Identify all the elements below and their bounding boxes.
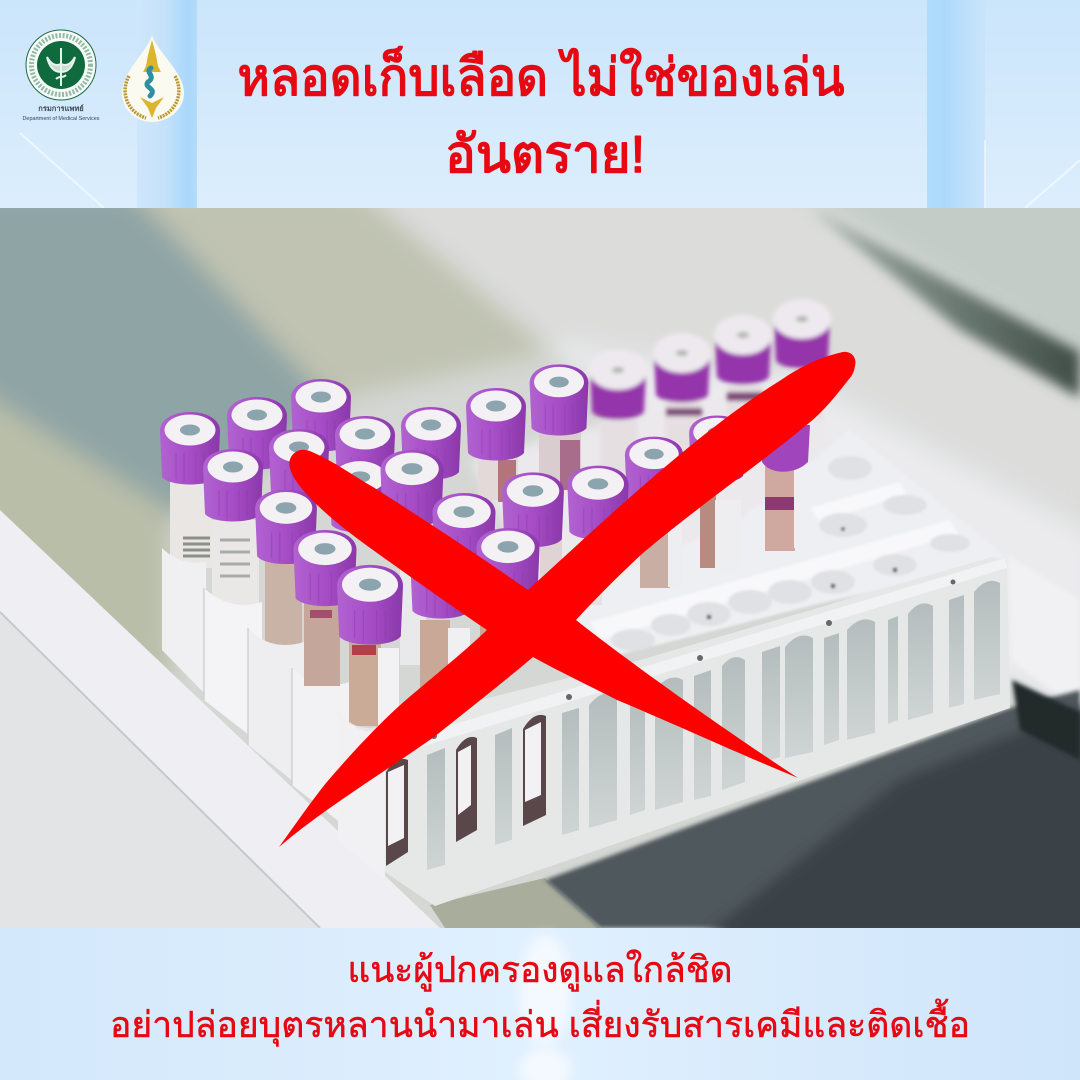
title: หลอดเก็บเลือด ไม่ใช่ของเล่น xyxy=(238,47,844,107)
back row of tubes xyxy=(589,299,831,475)
rack left stepped blocks xyxy=(162,548,350,830)
title xyxy=(238,47,844,184)
clear glass behind tubes xyxy=(472,378,784,580)
rack top surface with holes xyxy=(576,457,968,655)
photo: blood collection tubes in a white rack xyxy=(0,190,1080,940)
red X mark over the tubes xyxy=(279,352,855,847)
header background xyxy=(0,0,1080,208)
front tubes xyxy=(294,530,403,726)
title: อันตราย! xyxy=(445,126,645,184)
tubes, middle rows xyxy=(160,364,810,698)
photo background surfaces xyxy=(0,190,1080,940)
footer advice text: แนะผู้ปกครองดูแลใกล้ชิด xyxy=(348,949,732,992)
footer advice text: อย่าปล่อยบุตรหลานนำมาเล่น เสี่ยงรับสารเคมีและติดเชื้อ xyxy=(110,998,970,1047)
footer background xyxy=(0,928,1080,1080)
logo: Ministry of Public Health, Department of Medical Services xyxy=(22,30,100,122)
footer advice text xyxy=(110,949,970,1047)
logo: gold drop emblem xyxy=(122,35,184,122)
logo: Ministry of Public Health, Department of Medical Services: กรมการแพทย์ xyxy=(38,104,84,113)
logo: Ministry of Public Health, Department of Medical Services: Department of Medical Services xyxy=(22,116,100,122)
rack front face with slots xyxy=(338,557,1010,906)
